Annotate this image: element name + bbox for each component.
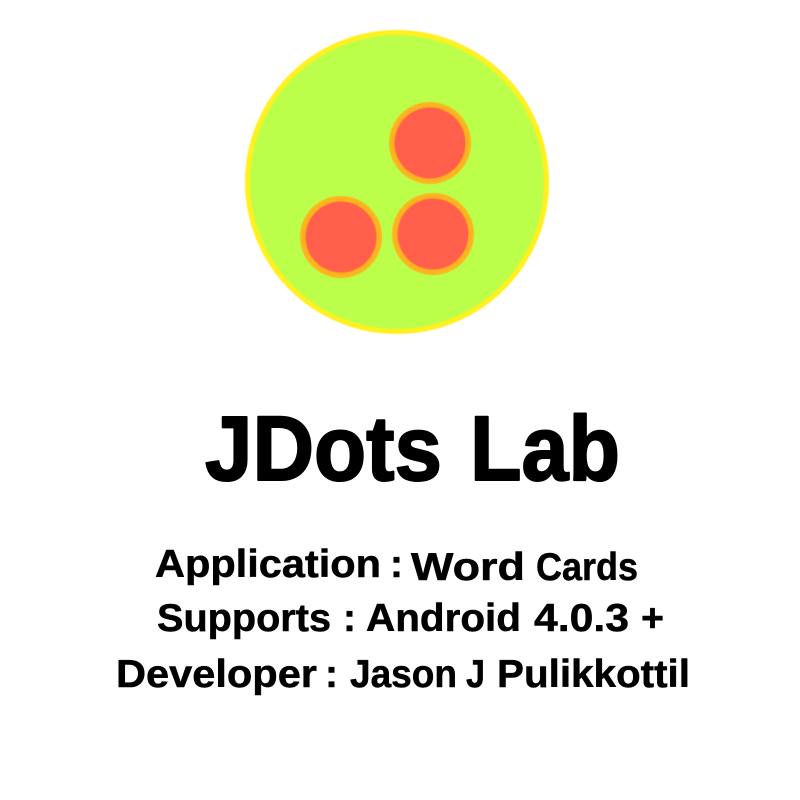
supported version: 4.0.3 bbox=[534, 597, 629, 640]
developer bbox=[116, 653, 690, 696]
developer: J bbox=[466, 653, 485, 696]
application name bbox=[411, 546, 638, 589]
icon: lower right dot bbox=[392, 193, 474, 275]
icon: lower left dot bbox=[300, 196, 382, 278]
supported version: : bbox=[343, 597, 356, 640]
application name: Cards bbox=[536, 546, 638, 589]
application name: Word bbox=[411, 546, 525, 589]
title bbox=[205, 398, 620, 500]
developer: : bbox=[325, 653, 338, 696]
application label: : bbox=[390, 543, 403, 586]
developer: Jason bbox=[350, 653, 457, 696]
supported version bbox=[157, 597, 664, 640]
supported version: Android bbox=[366, 597, 521, 640]
application label: Application bbox=[155, 543, 381, 586]
supported version: Supports bbox=[157, 597, 331, 640]
icon: JDots logo bbox=[245, 30, 549, 334]
supported version: + bbox=[641, 597, 664, 640]
icon: top dot bbox=[389, 102, 471, 184]
text block: app details bbox=[116, 543, 690, 696]
developer: Pulikkottil bbox=[497, 653, 690, 696]
developer: Developer bbox=[116, 653, 317, 696]
title: Lab bbox=[470, 398, 620, 500]
logo background disc bbox=[245, 30, 549, 334]
title: JDots bbox=[205, 398, 442, 500]
